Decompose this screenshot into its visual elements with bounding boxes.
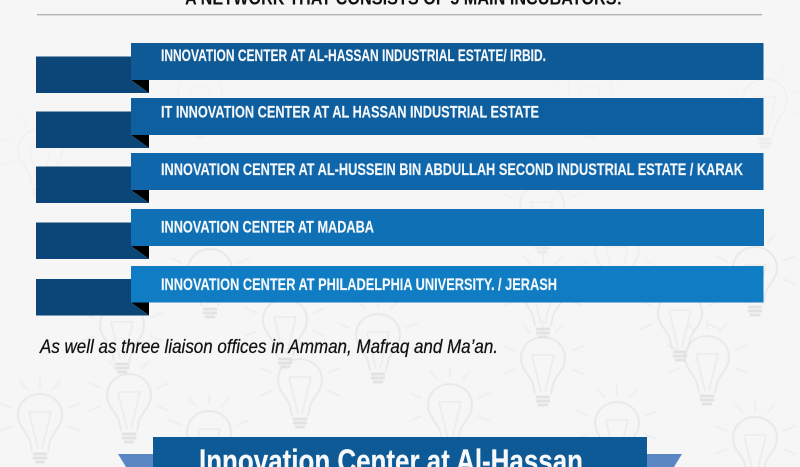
liaison offices note: As well as three liaison offices in Amman, Mafraq and Ma’an. <box>39 337 498 358</box>
ribbon 1: Al-Hassan Industrial Estate <box>36 43 764 93</box>
ribbon 1: Al-Hassan Industrial Estate: INNOVATION CENTER AT AL-HASSAN INDUSTRIAL ESTATE/ IRBID. <box>161 47 546 65</box>
heading rule <box>37 14 762 15</box>
ribbon 4: Madaba <box>36 209 764 259</box>
ribbon 4: Madaba: INNOVATION CENTER AT MADABA <box>161 218 374 236</box>
ribbon 5: Philadelphia University: INNOVATION CENTER AT PHILADELPHIA UNIVERSITY. / JERASH <box>161 276 557 294</box>
ribbon 5: Philadelphia University <box>36 266 764 316</box>
ribbon 3: Al-Hussein Bin Abdullah Second Industrial Estate <box>36 153 764 203</box>
ribbon 2: IT Innovation Center: IT INNOVATION CENTER AT AL HASSAN INDUSTRIAL ESTATE <box>161 104 539 122</box>
section banner: Innovation Center at Al-Hassan <box>118 437 682 467</box>
ribbon 2: IT Innovation Center <box>36 98 764 148</box>
